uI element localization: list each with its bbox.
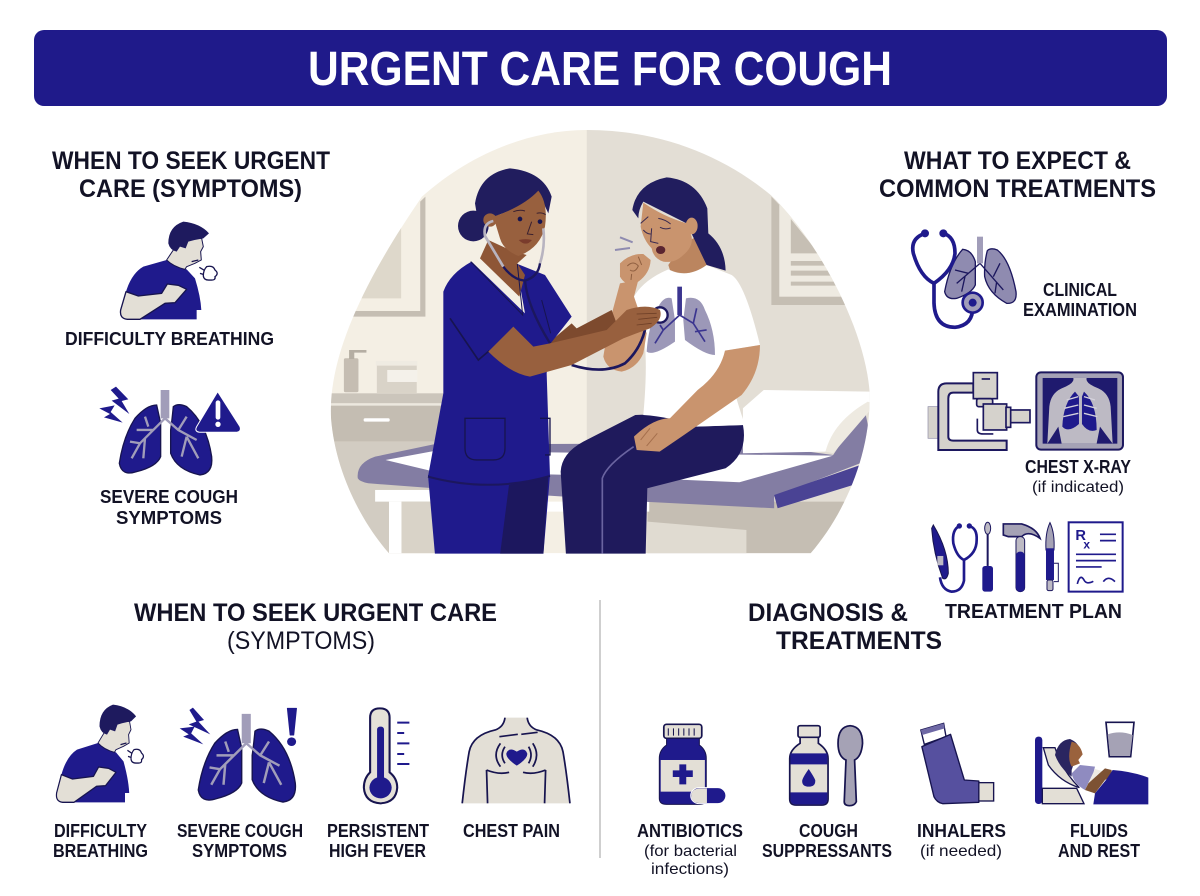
heading: what to expect and common treatments xyxy=(879,147,1156,203)
label: clinical examination: EXAMINATION xyxy=(1023,300,1137,320)
icon: inhaler xyxy=(921,723,994,804)
label: persistent high fever xyxy=(327,821,429,861)
label: antibiotics xyxy=(637,821,743,878)
icon: antibiotics bottle and capsule xyxy=(659,724,726,804)
label: treatment plan: TREATMENT PLAN xyxy=(945,601,1122,623)
heading: when to seek urgent care, lower: (SYMPTOMS) xyxy=(227,627,375,655)
label: antibiotics: ANTIBIOTICS xyxy=(637,821,743,841)
label: clinical examination xyxy=(1023,280,1137,320)
icon: man with difficulty breathing, lower xyxy=(56,705,143,802)
icon: cough syrup and spoon xyxy=(790,726,863,806)
icon: thermometer xyxy=(364,708,409,803)
label: persistent high fever: HIGH FEVER xyxy=(329,841,426,861)
heading: what to expect and common treatments: COMMON TREATMENTS xyxy=(879,175,1156,203)
nurse forearm and hand xyxy=(488,307,661,377)
label: difficulty breathing, lower xyxy=(53,821,148,861)
label: antibiotics: (for bacterial xyxy=(644,843,737,860)
icon: person resting in bed with glass of water xyxy=(1035,722,1148,804)
nurse xyxy=(428,168,617,555)
icon: x-ray machine and chest film xyxy=(928,372,1123,450)
title banner: URGENT CARE FOR COUGH xyxy=(308,43,892,96)
heading: diagnosis and treatments: DIAGNOSIS & xyxy=(748,599,908,627)
label: severe cough symptoms xyxy=(100,487,238,528)
label: cough suppressants: SUPPRESSANTS xyxy=(762,841,892,861)
patient lungs on shirt xyxy=(647,287,715,355)
label: difficulty breathing, lower: BREATHING xyxy=(53,841,148,861)
label: clinical examination: CLINICAL xyxy=(1043,280,1117,300)
label: inhalers xyxy=(917,821,1006,860)
label: chest x-ray: (if indicated) xyxy=(1032,479,1124,496)
label: inhalers: (if needed) xyxy=(920,843,1002,860)
icon: lungs with warning triangle xyxy=(99,387,240,475)
label: fluids and rest xyxy=(1058,821,1140,861)
heading: when to seek urgent care, upper left: WHEN TO SEEK URGENT xyxy=(52,147,330,175)
people xyxy=(428,168,760,555)
label: chest x-ray xyxy=(1025,457,1131,496)
label: cough suppressants: COUGH xyxy=(799,821,858,841)
label: inhalers: INHALERS xyxy=(917,821,1006,841)
label: severe cough symptoms: SYMPTOMS xyxy=(116,508,222,528)
icon: lungs with exclamation mark xyxy=(180,708,296,802)
icon: treatment tools and prescription: R xyxy=(1075,528,1086,544)
patient xyxy=(561,177,760,555)
heading: diagnosis and treatments: TREATMENTS xyxy=(776,627,942,655)
heading: when to seek urgent care, upper left xyxy=(52,147,330,203)
heading: when to seek urgent care, lower: WHEN TO SEEK URGENT CARE xyxy=(134,599,497,627)
title banner xyxy=(34,30,1167,106)
heading: diagnosis and treatments xyxy=(748,599,942,655)
icon: treatment tools and prescription xyxy=(932,522,1123,592)
label: chest x-ray: CHEST X-RAY xyxy=(1025,457,1131,477)
label: antibiotics: infections) xyxy=(651,861,729,878)
label: severe cough symptoms, lower: SEVERE COUGH xyxy=(177,821,303,841)
heading: what to expect and common treatments: WHAT TO EXPECT & xyxy=(904,147,1131,175)
icon: chest with heart pain xyxy=(462,718,570,803)
label: cough suppressants xyxy=(762,821,892,861)
stethoscope chest piece xyxy=(652,307,668,323)
label: fluids and rest: AND REST xyxy=(1058,841,1140,861)
label: difficulty breathing: DIFFICULTY BREATHING xyxy=(65,329,274,349)
heading: when to seek urgent care, upper left: CARE (SYMPTOMS) xyxy=(79,175,302,203)
central illustration: nurse examining coughing patient xyxy=(327,125,877,558)
label: fluids and rest: FLUIDS xyxy=(1070,821,1128,841)
label: persistent high fever: PERSISTENT xyxy=(327,821,429,841)
icon: man with difficulty breathing xyxy=(120,222,217,319)
label: difficulty breathing, lower: DIFFICULTY xyxy=(54,821,147,841)
icon: stethoscope and lungs xyxy=(913,229,1016,327)
icon: treatment tools and prescription: x xyxy=(1083,537,1090,551)
heading: when to seek urgent care, lower xyxy=(134,599,497,655)
label: chest pain: CHEST PAIN xyxy=(463,821,560,841)
stethoscope tubing xyxy=(485,221,645,370)
label: severe cough symptoms, lower xyxy=(177,821,303,861)
label: severe cough symptoms: SEVERE COUGH xyxy=(100,487,238,507)
label: severe cough symptoms, lower: SYMPTOMS xyxy=(192,841,287,861)
